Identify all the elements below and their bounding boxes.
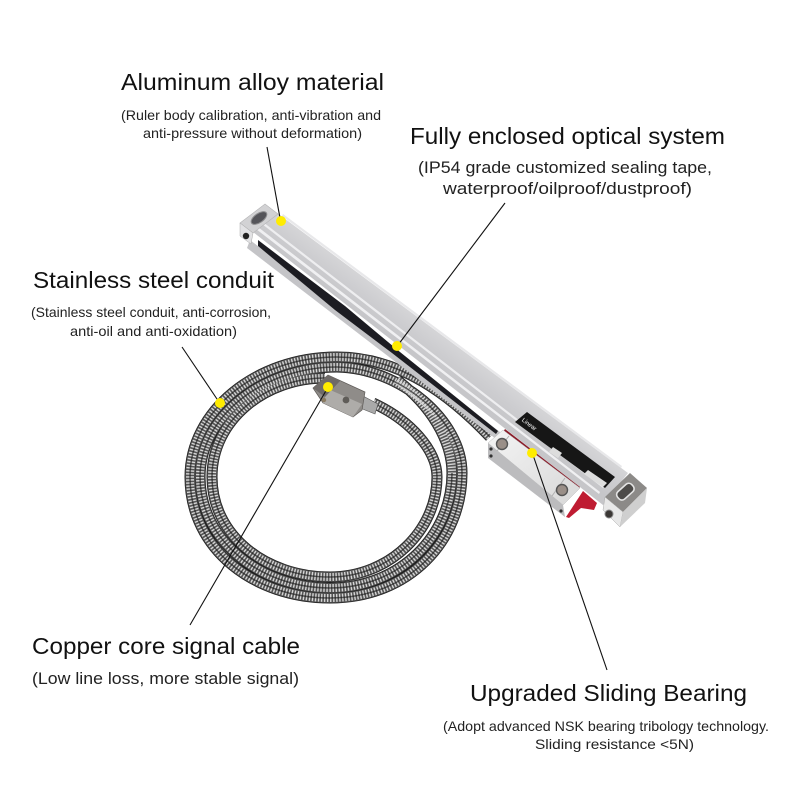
red slider wedge — [566, 491, 597, 518]
callout: copper core signal cable: Copper core signal cable — [32, 633, 300, 659]
leader line and dot: sliding bearing — [527, 448, 607, 670]
leader line and dot: aluminum alloy — [267, 147, 286, 226]
stainless steel cable coil — [190, 357, 490, 598]
callout: stainless steel conduit: Stainless steel conduit — [33, 267, 274, 293]
callout: fully enclosed optical system — [410, 123, 725, 198]
callout: stainless steel conduit: (Stainless steel conduit, anti-corrosion, — [31, 304, 271, 320]
callout: stainless steel conduit: anti-oil and anti-oxidation) — [70, 323, 237, 339]
callout: fully enclosed optical system: waterproof/oilproof/dustproof) — [442, 179, 692, 198]
right end block — [603, 473, 647, 527]
callout: stainless steel conduit — [31, 267, 274, 339]
callout: aluminum alloy material — [121, 69, 384, 141]
red sealing strip — [503, 429, 580, 490]
D-sub connector — [313, 375, 378, 417]
leader line and dot: enclosed optical system — [392, 203, 505, 351]
callout: upgraded sliding bearing — [443, 680, 769, 752]
left end block — [240, 204, 278, 244]
leader line and dot: copper core cable — [190, 382, 333, 625]
callout: copper core signal cable: (Low line loss, more stable signal) — [32, 669, 299, 688]
linear scale rail — [240, 204, 647, 527]
callout: aluminum alloy material: Aluminum alloy material — [121, 69, 384, 95]
callout: fully enclosed optical system: Fully enclosed optical system — [410, 123, 725, 149]
callout: copper core signal cable — [32, 633, 300, 688]
black specification label: Linear — [520, 418, 537, 432]
rail face highlights — [256, 214, 622, 494]
callout: aluminum alloy material: (Ruler body calibration, anti-vibration and — [121, 107, 381, 123]
callout: upgraded sliding bearing: Upgraded Sliding Bearing — [470, 680, 747, 706]
callout: fully enclosed optical system: (IP54 grade customized sealing tape, — [418, 158, 712, 177]
sliding bearing block — [488, 430, 580, 517]
rail top face — [240, 204, 628, 505]
rail underside — [247, 240, 500, 439]
leader line and dot: stainless conduit — [182, 347, 225, 408]
callout: upgraded sliding bearing: Sliding resistance <5N) — [535, 736, 694, 752]
callout: aluminum alloy material: anti-pressure without deformation) — [143, 125, 362, 141]
black specification label — [515, 412, 615, 488]
rail shadow groove — [258, 240, 498, 434]
callout: upgraded sliding bearing: (Adopt advanced NSK bearing tribology technology. — [443, 718, 769, 734]
